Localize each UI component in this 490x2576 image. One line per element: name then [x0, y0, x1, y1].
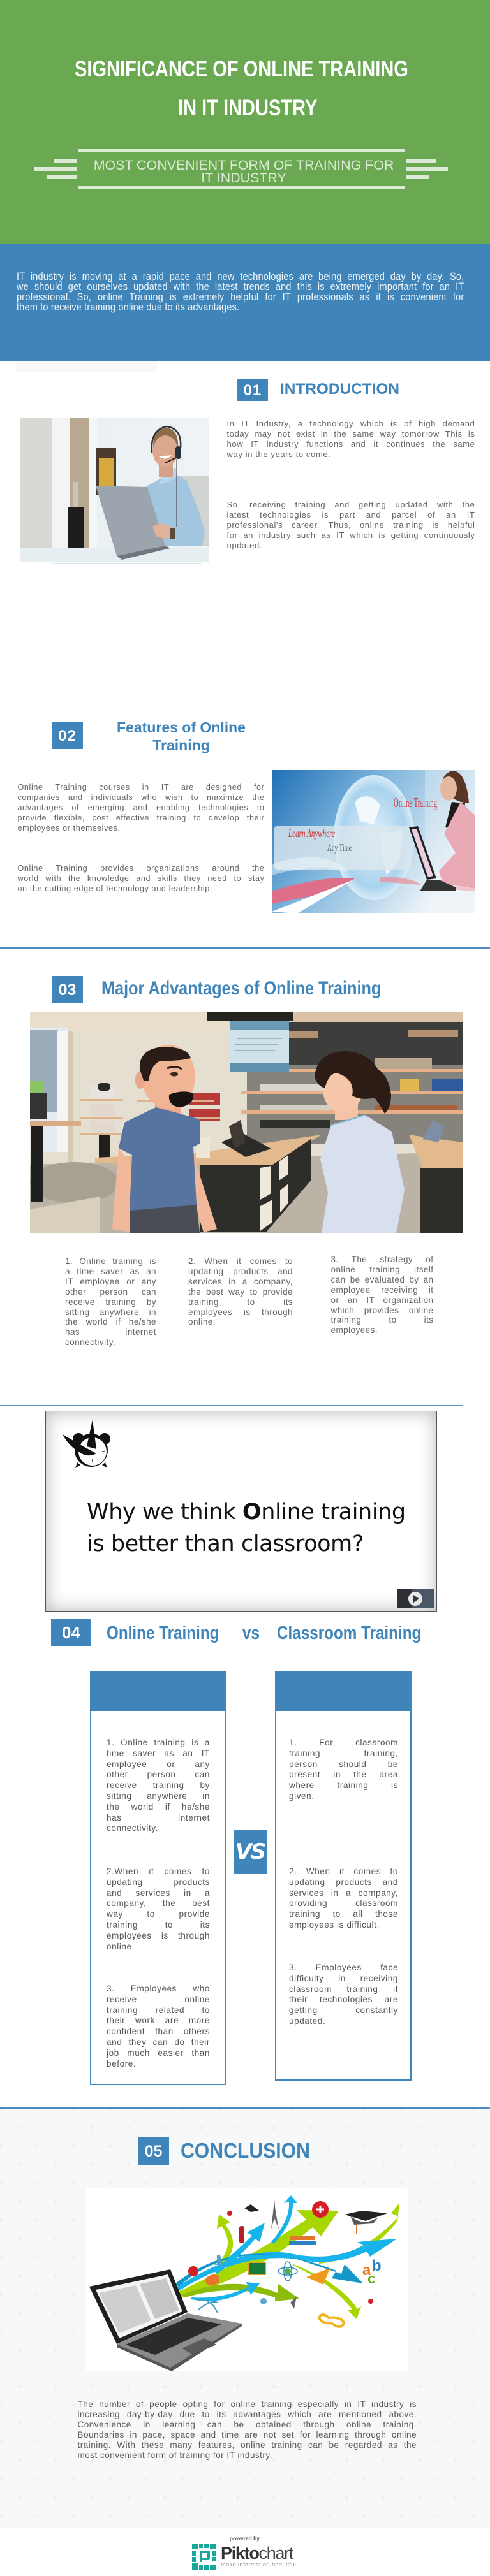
text: classroom point 1: 1. For classroom — [289, 1738, 398, 1747]
column header — [275, 1671, 412, 1711]
text: online point 1 — [107, 1738, 210, 1833]
centre counter — [95, 1120, 330, 1232]
column header — [90, 1671, 226, 1711]
section number 02 — [52, 722, 83, 749]
text: advantage 3: 3. The strategy of — [330, 1255, 434, 1264]
badge: VS: VS — [235, 1839, 265, 1865]
text: classroom point 2: training to all those — [289, 1909, 398, 1919]
text: online point 3: 3. Employees who — [107, 1984, 210, 1993]
section number 05: 05 — [145, 2143, 162, 2160]
text: online point 3: job much easier than — [107, 2048, 210, 2058]
text: classroom point 2 — [289, 1867, 398, 1930]
right counter — [409, 1120, 463, 1233]
left wall shelving — [80, 1083, 220, 1160]
text: online point 2: updating products — [107, 1877, 210, 1887]
text: classroom point 3: their technologies are — [289, 1995, 398, 2004]
intro text: them to receive training online due to its advantages. — [17, 302, 239, 313]
text: advantage 3: employees. — [330, 1325, 378, 1335]
panel: green title banner — [0, 0, 490, 244]
text: introduction paragraph 1: In IT Industry, a technology which is of high demand — [227, 419, 475, 428]
text: conclusion paragraph — [78, 2399, 417, 2460]
text: online point 1: connectivity. — [107, 1823, 158, 1833]
text: introduction paragraph 1: way in the years to come. — [227, 449, 330, 459]
section number 01 — [237, 379, 268, 401]
text: advantage 2: services in a company, — [188, 1277, 293, 1286]
intro text — [17, 271, 464, 313]
panel: classroom training column — [275, 1671, 412, 2081]
illustration: laptop with learning arrows — [89, 2195, 403, 2371]
text: Learn Anywhere: Learn Anywhere — [288, 827, 335, 840]
title — [75, 57, 408, 120]
text: advantage 3: can be evaluated by an — [330, 1275, 434, 1284]
section number 01: 01 — [244, 382, 262, 399]
text: online point 2: company, the best — [107, 1898, 210, 1908]
intro text: professional. So, online Training is extremely helpful for IT professionals as it is convenient for — [17, 291, 464, 303]
text: classroom point 3: 3. Employees face — [289, 1963, 398, 1972]
text: online point 1: has internet — [107, 1813, 210, 1823]
section number 03: 03 — [59, 981, 76, 999]
small icons: a — [362, 2262, 371, 2279]
text: features paragraph 1: provide flexible, cost effective training to develop their — [18, 813, 264, 822]
woman — [442, 771, 469, 803]
text: advantage 1: IT employee or any — [65, 1277, 156, 1286]
heading: online vs classroom: Online Training — [107, 1623, 219, 1643]
text: classroom point 3 — [289, 1963, 398, 2026]
text: classroom point 2: providing classroom — [289, 1898, 398, 1908]
text: online point 1: other person can — [107, 1770, 210, 1779]
text: features paragraph 1: companies and individuals who wish to maximize the — [18, 793, 264, 802]
text: classroom point 3: difficulty in receiving — [289, 1974, 398, 1983]
text: advantage 3: training to its — [330, 1315, 434, 1325]
text: classroom point 1: person should be — [289, 1759, 398, 1769]
footer: powered by Piktochart — [192, 2535, 296, 2570]
text: advantage 1 — [65, 1256, 156, 1347]
text: classroom point 3: getting constantly — [289, 2005, 398, 2015]
text: question: Why we think Online training — [87, 1499, 406, 1525]
section number 05 — [138, 2137, 169, 2165]
text: online point 2: employees is through — [107, 1931, 210, 1940]
text: features paragraph 1 — [18, 783, 264, 833]
photo: man with headset at laptop — [20, 418, 209, 564]
text: classroom point 2: employees is difficult. — [289, 1920, 380, 1930]
text: online point 2: way to provide — [107, 1909, 210, 1919]
blue arrows — [172, 2195, 397, 2301]
photo: online training banner — [272, 770, 475, 913]
text: advantage 1: sitting anywhere in — [65, 1307, 156, 1317]
text: introduction paragraph 2: latest technologies is part and parcel of an IT — [227, 510, 475, 520]
text: online point 3: before. — [107, 2059, 136, 2069]
text: classroom point 1: given. — [289, 1791, 315, 1801]
text: online point 1: 1. Online training is a — [107, 1738, 210, 1747]
text: conclusion paragraph: increasing day-by-day due to its advantages which are mentioned above. — [78, 2410, 417, 2419]
text: online point 1: time saver as an IT — [107, 1749, 210, 1758]
text: introduction paragraph 2 — [227, 500, 475, 550]
text: conclusion paragraph: The number of people opting for online training especially in IT industry is — [78, 2399, 417, 2409]
text: introduction paragraph 1: how IT industry functions and it continues the same — [227, 439, 475, 449]
text: introduction paragraph 2: So, receiving training and getting updated with the — [227, 500, 475, 509]
text: classroom point 1: present in the area — [289, 1770, 398, 1779]
text: advantage 1: connectivity. — [65, 1337, 115, 1347]
text: conclusion paragraph: Boundaries in pace, space and time are not set for learning through online — [78, 2430, 417, 2440]
text: online point 2: 2.When it comes to — [107, 1867, 210, 1876]
text: advantage 2: employees is through — [188, 1307, 293, 1317]
text: online point 1: employee or any — [107, 1759, 210, 1769]
laptop — [89, 2269, 242, 2371]
text: question — [87, 1499, 406, 1557]
panel: video still with question — [45, 1411, 437, 1612]
heading: features: Features of Online — [117, 719, 246, 736]
text: online point 3: their work are more — [107, 2016, 210, 2025]
text: advantage 1: a time saver as an — [65, 1267, 156, 1276]
text: features paragraph 2 — [18, 864, 264, 893]
text: online point 2: training to its — [107, 1920, 210, 1930]
text: features paragraph 2: world with the knowledge and skills they need to stay — [18, 874, 264, 883]
subtitle: MOST CONVENIENT FORM OF TRAINING FOR — [94, 157, 394, 173]
title: IN IT INDUSTRY — [178, 96, 317, 120]
text: question: is better than classroom? — [87, 1531, 364, 1557]
heading: online vs classroom — [107, 1623, 421, 1643]
text: conclusion paragraph: most convenient form of training for IT industry. — [78, 2450, 272, 2460]
text: online point 2: online. — [107, 1942, 135, 1951]
panel: conclusion background — [0, 2107, 490, 2528]
text: introduction paragraph 2: updated. — [227, 541, 262, 550]
text: online point 3: and they can do their — [107, 2037, 210, 2047]
divider line — [0, 1405, 463, 1406]
heading: major advantages: Major Advantages of Online Training — [101, 978, 381, 999]
woman avatar — [315, 1051, 405, 1233]
badge: VS — [234, 1830, 267, 1874]
text: advantage 3 — [330, 1255, 434, 1335]
text: advantage 2: 2. When it comes to — [188, 1256, 293, 1266]
text: online point 1: receive training by — [107, 1780, 210, 1790]
section number 04: 04 — [62, 1623, 80, 1642]
text: classroom point 1: training training, — [289, 1749, 398, 1758]
text: classroom point 3: updated. — [289, 2016, 325, 2026]
text: online point 3: receive online — [107, 1995, 210, 2004]
small icons: c — [368, 2271, 375, 2287]
panel: blue intro band — [0, 244, 490, 361]
intro text: we should get ourselves updated with the latest trends and this is extremely important for an IT — [17, 281, 464, 293]
icon: piktochart logo — [192, 2544, 216, 2570]
text: advantage 1: has internet — [65, 1327, 156, 1337]
text: online point 1: the world if he/she — [107, 1802, 210, 1812]
text: features paragraph 2: Online Training provides organizations around the — [18, 864, 264, 873]
text: classroom point 2: updating products and — [289, 1877, 398, 1887]
text: features paragraph 1: Online Training courses in IT are designed for — [18, 783, 264, 792]
heading: online vs classroom: vs — [242, 1623, 259, 1643]
text: advantage 2: online. — [188, 1317, 216, 1327]
heading: features: Training — [152, 737, 210, 753]
intro text: IT industry is moving at a rapid pace and new technologies are being emerged day by day. So, — [17, 271, 464, 282]
heading: features — [117, 719, 246, 753]
text: advantage 3: which provides online — [330, 1306, 434, 1315]
title: SIGNIFICANCE OF ONLINE TRAINING — [75, 57, 408, 82]
text: features paragraph 1: employees or themselves. — [18, 824, 121, 833]
text: classroom point 1: where training is — [289, 1780, 398, 1790]
section number 04 — [51, 1619, 91, 1646]
text: classroom point 1 — [289, 1738, 398, 1801]
section number 03 — [52, 976, 83, 1003]
text: conclusion paragraph: Convenience in learning can be obtained through online training. — [78, 2420, 417, 2429]
small icons: b — [372, 2257, 382, 2274]
text: online point 3: training related to — [107, 2005, 210, 2015]
back shelves with products — [241, 1058, 463, 1114]
text: advantage 1: 1. Online training is — [65, 1256, 156, 1266]
text: advantage 1: the world if he/she — [65, 1317, 156, 1327]
heading: introduction: INTRODUCTION — [280, 381, 399, 398]
panel: online training column — [90, 1671, 226, 2085]
divider line — [0, 947, 490, 949]
heading: conclusion: CONCLUSION — [181, 2139, 310, 2162]
text: advantage 1: receive training by — [65, 1297, 156, 1307]
text: Piktochart wordmark: Piktochart — [221, 2543, 293, 2563]
man avatar — [112, 1045, 217, 1233]
text: conclusion paragraph: training. With these many features, online training can be regarded as the — [78, 2440, 417, 2450]
text: classroom point 2: services in a company, — [289, 1888, 398, 1898]
text: advantage 2 — [188, 1256, 293, 1327]
text: online point 3 — [106, 1984, 210, 2069]
wall sign — [230, 1021, 289, 1072]
text: advantage 2: training to its — [188, 1297, 293, 1307]
subtitle ribbon — [34, 149, 448, 189]
text: classroom point 3: classroom training if — [289, 1984, 398, 1994]
text: classroom point 2: 2. When it comes to — [289, 1867, 398, 1876]
text: introduction paragraph 2: for an industry such as IT which is getting continuously — [227, 530, 475, 540]
icon: winged alarm clock — [63, 1420, 110, 1468]
text: powered by: powered by — [230, 2535, 260, 2542]
photo: avatars in an electronics store — [30, 1012, 463, 1233]
text: online point 3: confident than others — [107, 2027, 210, 2036]
text: advantage 2: updating products and — [188, 1267, 293, 1276]
text: introduction paragraph 2: professional's career. Thus, online training is helpful — [227, 520, 475, 530]
section number 02: 02 — [58, 727, 77, 745]
text: introduction paragraph 1: today may not exist in the same way tomorrow This is — [227, 429, 475, 439]
text: online point 2 — [107, 1867, 210, 1951]
small icons — [168, 2199, 387, 2327]
text: features paragraph 2: on the cutting edge of technology and leadership. — [18, 884, 212, 893]
text: advantage 3: online training itself — [330, 1265, 434, 1274]
text: features paragraph 1: advantages of emerging and enabling technologies to — [18, 803, 264, 812]
text: advantage 3: or an IT organization — [330, 1295, 434, 1305]
laptop — [409, 826, 436, 880]
subtitle — [94, 157, 394, 186]
text: Any Time: Any Time — [327, 843, 352, 854]
subtitle: IT INDUSTRY — [201, 170, 286, 186]
text: introduction paragraph 1 — [227, 419, 475, 459]
text: online point 2: and services in a — [107, 1888, 210, 1898]
heading: online vs classroom: Classroom Training — [277, 1623, 421, 1643]
text: tagline: make information beautiful — [221, 2561, 296, 2568]
text: advantage 1: other person can — [65, 1287, 156, 1297]
text: advantage 3: employee receiving it — [330, 1285, 434, 1295]
green arrows — [175, 2203, 399, 2319]
icon: small video thumbnail — [397, 1589, 434, 1608]
text: advantage 2: the best way to provide — [188, 1287, 293, 1297]
text: online point 1: sitting anywhere in — [107, 1791, 210, 1801]
